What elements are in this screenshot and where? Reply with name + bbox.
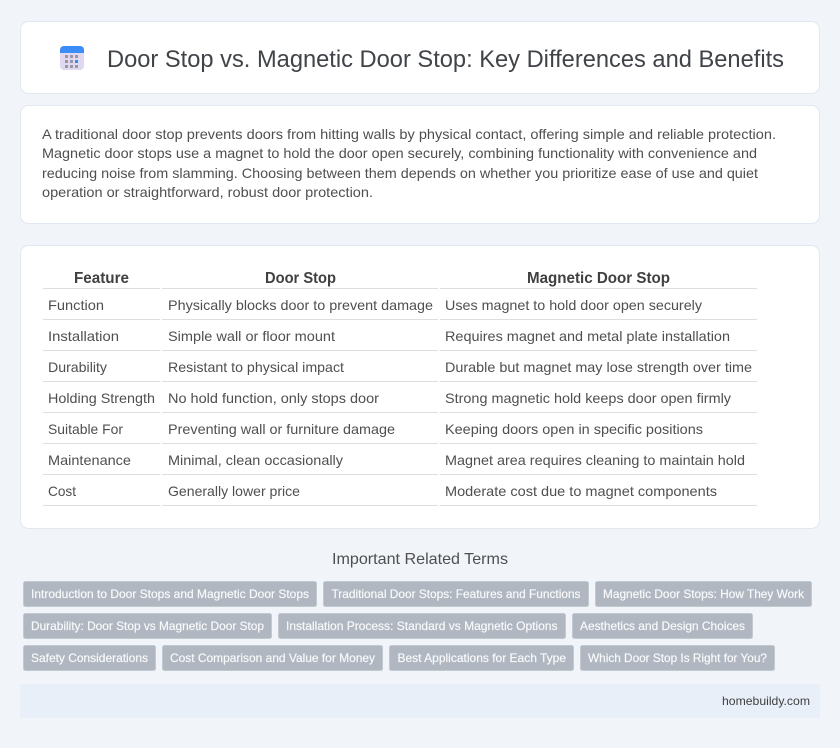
tag: best applications: Best Applications for Each Type: [398, 651, 566, 665]
panel: title header: [20, 22, 820, 94]
table row: installation: [48, 328, 730, 344]
footer bar: homebuildy.com: [722, 694, 810, 708]
tag: traditional door stops: Traditional Door Stops: Features and Functions: [332, 587, 580, 601]
tag: safety: Safety Considerations: [31, 651, 148, 665]
tag: installation process: Installation Process: Standard vs Magnetic Options: [286, 619, 558, 633]
table row: installation: Simple wall or floor mount: [168, 328, 335, 344]
panel: introduction paragraph: [20, 106, 820, 224]
table row: maintenance: Magnet area requires cleaning to maintain hold: [445, 452, 745, 468]
tag: magnetic door stops: Magnetic Door Stops: How They Work: [603, 587, 805, 601]
tag: best applications: [390, 646, 574, 670]
table row: maintenance: Minimal, clean occasionally: [168, 452, 343, 468]
related term tags: [24, 582, 812, 670]
table row: maintenance: Maintenance: [48, 452, 131, 468]
table header row: Magnetic Door Stop: [527, 270, 670, 287]
table header row: [74, 270, 670, 287]
tag: traditional door stops: [324, 582, 588, 606]
tag: safety: [24, 646, 156, 670]
tag: durability: Durability: Door Stop vs Magnetic Door Stop: [31, 619, 264, 633]
table row: suitable for: Preventing wall or furniture damage: [168, 421, 395, 437]
table row: suitable for: Suitable For: [48, 421, 123, 437]
table row: cost: [48, 483, 717, 499]
tag: durability: [24, 614, 272, 638]
table row: durability: Durability: [48, 359, 107, 375]
footer bar: [20, 684, 820, 718]
tag: which door stop: Which Door Stop Is Right for You?: [588, 651, 767, 665]
title: Door Stop vs. Magnetic Door Stop: Key Differences and Benefits: [107, 46, 784, 73]
tag: installation process: [278, 614, 566, 638]
table row: function: Physically blocks door to prevent damage: [168, 297, 433, 313]
heading: related terms: Important Related Terms: [332, 551, 508, 568]
table header row: Feature: [74, 270, 129, 287]
tag: cost comparison: Cost Comparison and Value for Money: [170, 651, 375, 665]
tag: which door stop: [580, 646, 774, 670]
table row: function: Uses magnet to hold door open securely: [445, 297, 702, 313]
tag: aesthetics: [572, 614, 752, 638]
table header row: Door Stop: [265, 270, 336, 287]
table row: installation: Requires magnet and metal plate installation: [445, 328, 730, 344]
table row: function: Function: [48, 297, 104, 313]
table row: cost: Generally lower price: [168, 483, 300, 499]
table row: durability: [48, 359, 752, 375]
tag: magnetic door stops: [596, 582, 812, 606]
table row: installation: Installation: [48, 328, 119, 344]
panel: introduction paragraph: operation or straightforward, robust door protection.: [42, 184, 373, 200]
table row: durability: Resistant to physical impact: [168, 359, 344, 375]
table row: suitable for: [48, 421, 703, 437]
tag: introduction: Introduction to Door Stops and Magnetic Door Stops: [31, 587, 309, 601]
table row: suitable for: Keeping doors open in specific positions: [445, 421, 703, 437]
panel: comparison table: [20, 246, 820, 528]
table row: holding strength: No hold function, only stops door: [168, 390, 379, 406]
tag: cost comparison: [162, 646, 382, 670]
table row: holding strength: [48, 390, 731, 406]
panel: introduction paragraph: reducing noise from slamming. Choosing between them depends on whether you prioritize ease of use and quiet: [42, 165, 758, 181]
panel: introduction paragraph: A traditional door stop prevents doors from hitting walls by physical contact, offering simple and reliable protection.: [42, 126, 776, 142]
panel: introduction paragraph: Magnetic door stops use a magnet to hold the door open securely, combining functionality with convenience and: [42, 145, 757, 161]
table row: cost: Cost: [48, 483, 76, 499]
table row: holding strength: Holding Strength: [48, 390, 155, 406]
table row: maintenance: [48, 452, 745, 468]
icon: calendar grid: [60, 46, 84, 70]
table row: durability: Durable but magnet may lose strength over time: [445, 359, 752, 375]
table row: function: [48, 297, 702, 313]
table row: cost: Moderate cost due to magnet components: [445, 483, 717, 499]
table row: holding strength: Strong magnetic hold keeps door open firmly: [445, 390, 731, 406]
tag: introduction: [24, 582, 316, 606]
tag: aesthetics: Aesthetics and Design Choices: [580, 619, 745, 633]
